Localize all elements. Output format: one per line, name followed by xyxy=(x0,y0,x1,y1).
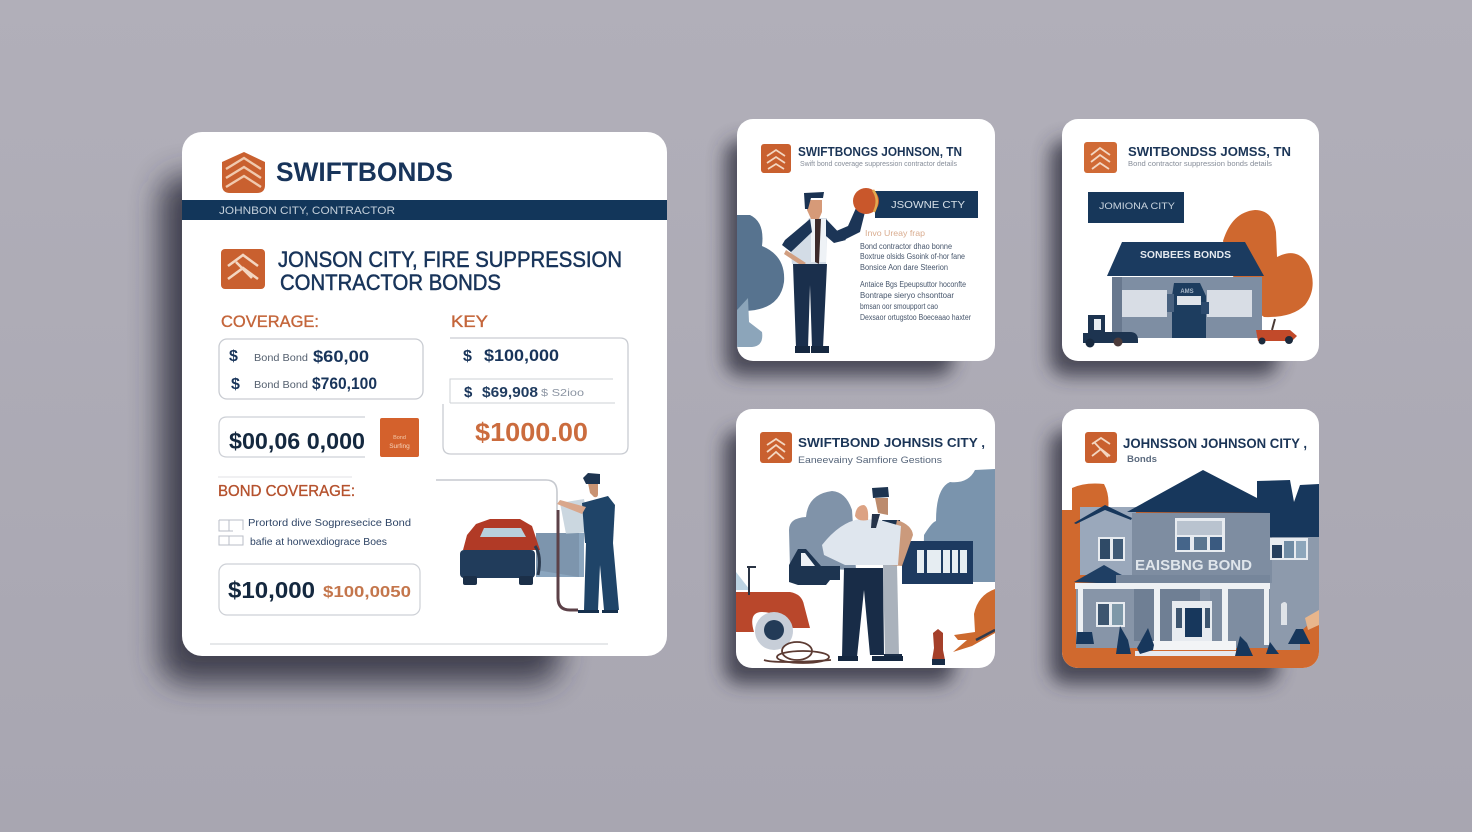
key amounts box: $69,908 xyxy=(482,384,538,401)
hose xyxy=(764,642,831,663)
checklist: Prortord dive Sogpresecice Bond xyxy=(248,517,411,529)
heading: coverage: COVERAGE: xyxy=(221,313,319,331)
red car xyxy=(736,567,810,650)
shrubs xyxy=(1076,626,1310,656)
icon: logo xyxy=(761,144,791,173)
icon: main SwiftBonds logo xyxy=(222,152,265,193)
bottom amounts box: $10,000 xyxy=(228,577,315,603)
icon: logo xyxy=(1085,432,1117,463)
key amounts box: $ xyxy=(464,384,473,401)
panel: main contractor bond card xyxy=(160,132,667,683)
coverage amounts box: Bond Bond xyxy=(254,352,308,364)
house xyxy=(1074,470,1319,656)
orange badge: Bond xyxy=(393,435,406,441)
card subtitle: Eaneevainy Samfiore Gestions xyxy=(798,455,942,466)
panel: card D, bonded house xyxy=(1050,409,1319,684)
agent figure xyxy=(782,188,879,353)
card title: SWITBONDSS JOMSS, TN xyxy=(1128,144,1291,159)
header band: JOHNBON CITY, CONTRACTOR xyxy=(219,205,395,217)
text block xyxy=(860,228,971,322)
key amounts box: $ xyxy=(463,348,472,365)
brand name: SWIFTBONDS xyxy=(276,157,453,187)
windows xyxy=(1098,518,1308,561)
checklist: bafie at horwexdiograce Boes xyxy=(250,536,387,548)
text block: Bond contractor dhao bonne xyxy=(860,242,952,251)
total amount box xyxy=(219,417,365,457)
office building: SONBEES BONDS xyxy=(1140,249,1231,261)
bottom amounts box: $100,0050 xyxy=(323,584,411,601)
orange tree xyxy=(1223,210,1313,317)
card title: SWIFTBONGS JOHNSON, TN xyxy=(798,144,962,159)
icon: logo xyxy=(760,432,792,463)
card title: SWIFTBOND JOHNSIS CITY , xyxy=(798,435,985,450)
bus xyxy=(902,541,973,584)
coverage amounts box: $ xyxy=(231,376,240,393)
cloud xyxy=(737,215,784,311)
coverage amounts box: $760,100 xyxy=(312,375,377,393)
icon: title logo xyxy=(221,249,265,289)
coverage amounts box: Bond Bond xyxy=(254,379,308,391)
checklist xyxy=(219,517,411,548)
truck: AMS xyxy=(1180,289,1194,295)
card title: JOHNSSON JOHNSON CITY , xyxy=(1123,436,1307,451)
total amount box: $00,06 0,000 xyxy=(229,428,365,454)
orange shape xyxy=(953,589,995,652)
key amounts box: $ S2ioo xyxy=(541,388,585,399)
hydrant xyxy=(932,629,945,665)
contractors xyxy=(822,487,913,661)
panel: card A, agent with details xyxy=(725,119,995,376)
key amounts box: $1000.00 xyxy=(475,417,588,447)
text block: Dexsaor ortugstoo Boeceaao haxter xyxy=(860,313,971,322)
house sign: EAISBNG BOND xyxy=(1135,557,1252,574)
porch xyxy=(1075,583,1270,656)
truck xyxy=(1167,283,1209,338)
panel: card C, contractors on site xyxy=(724,409,995,684)
orange backdrop xyxy=(1062,484,1319,668)
illustration: firefighter and truck xyxy=(436,473,619,613)
text block: bmsan oor smoupport cao xyxy=(860,302,938,311)
card subtitle: Bond contractor suppression bonds details xyxy=(1128,159,1272,168)
title: CONTRACTOR BONDS xyxy=(280,270,501,295)
text block: Bontrape sieryo chsonttoar xyxy=(860,291,954,300)
truck xyxy=(789,549,840,585)
card subtitle: Bonds xyxy=(1127,454,1157,464)
coverage amounts box xyxy=(219,339,423,399)
orange badge: Surfing xyxy=(389,443,410,450)
icon: logo xyxy=(1084,142,1117,173)
key amounts box: $100,000 xyxy=(484,347,559,365)
coverage amounts box: $60,00 xyxy=(313,348,369,366)
title xyxy=(278,247,622,295)
text block: Bonsice Aon dare Steerion xyxy=(860,263,948,272)
text block: Boxtrue olsids Gsoink of-hor fane xyxy=(860,252,965,261)
office building xyxy=(1107,242,1264,338)
truck xyxy=(460,519,540,585)
title: JONSON CITY, FIRE SUPPRESSION xyxy=(278,247,622,272)
small pickup truck xyxy=(1083,315,1138,348)
city banner: JOMIONA CITY xyxy=(1099,201,1176,212)
heading: bond coverage: BOND COVERAGE: xyxy=(218,483,355,500)
key amounts box xyxy=(443,338,628,454)
red machine xyxy=(1256,319,1297,344)
heading: key: KEY xyxy=(451,313,488,331)
clouds xyxy=(789,491,856,570)
city banner xyxy=(875,191,978,218)
card subtitle: Swift bond coverage suppression contractor details xyxy=(800,159,957,168)
orange badge xyxy=(380,418,419,457)
panel: card B, bond office xyxy=(1050,119,1319,376)
header band xyxy=(182,200,667,220)
city banner xyxy=(1088,192,1184,223)
text block: Antaice Bgs Epeupsuttor hoconfte xyxy=(860,280,966,289)
coverage amounts box: $ xyxy=(229,348,238,365)
text block: Invo Ureay frap xyxy=(865,228,925,238)
city banner: JSOWNE CTY xyxy=(891,200,965,211)
bottom amounts box xyxy=(219,564,420,615)
